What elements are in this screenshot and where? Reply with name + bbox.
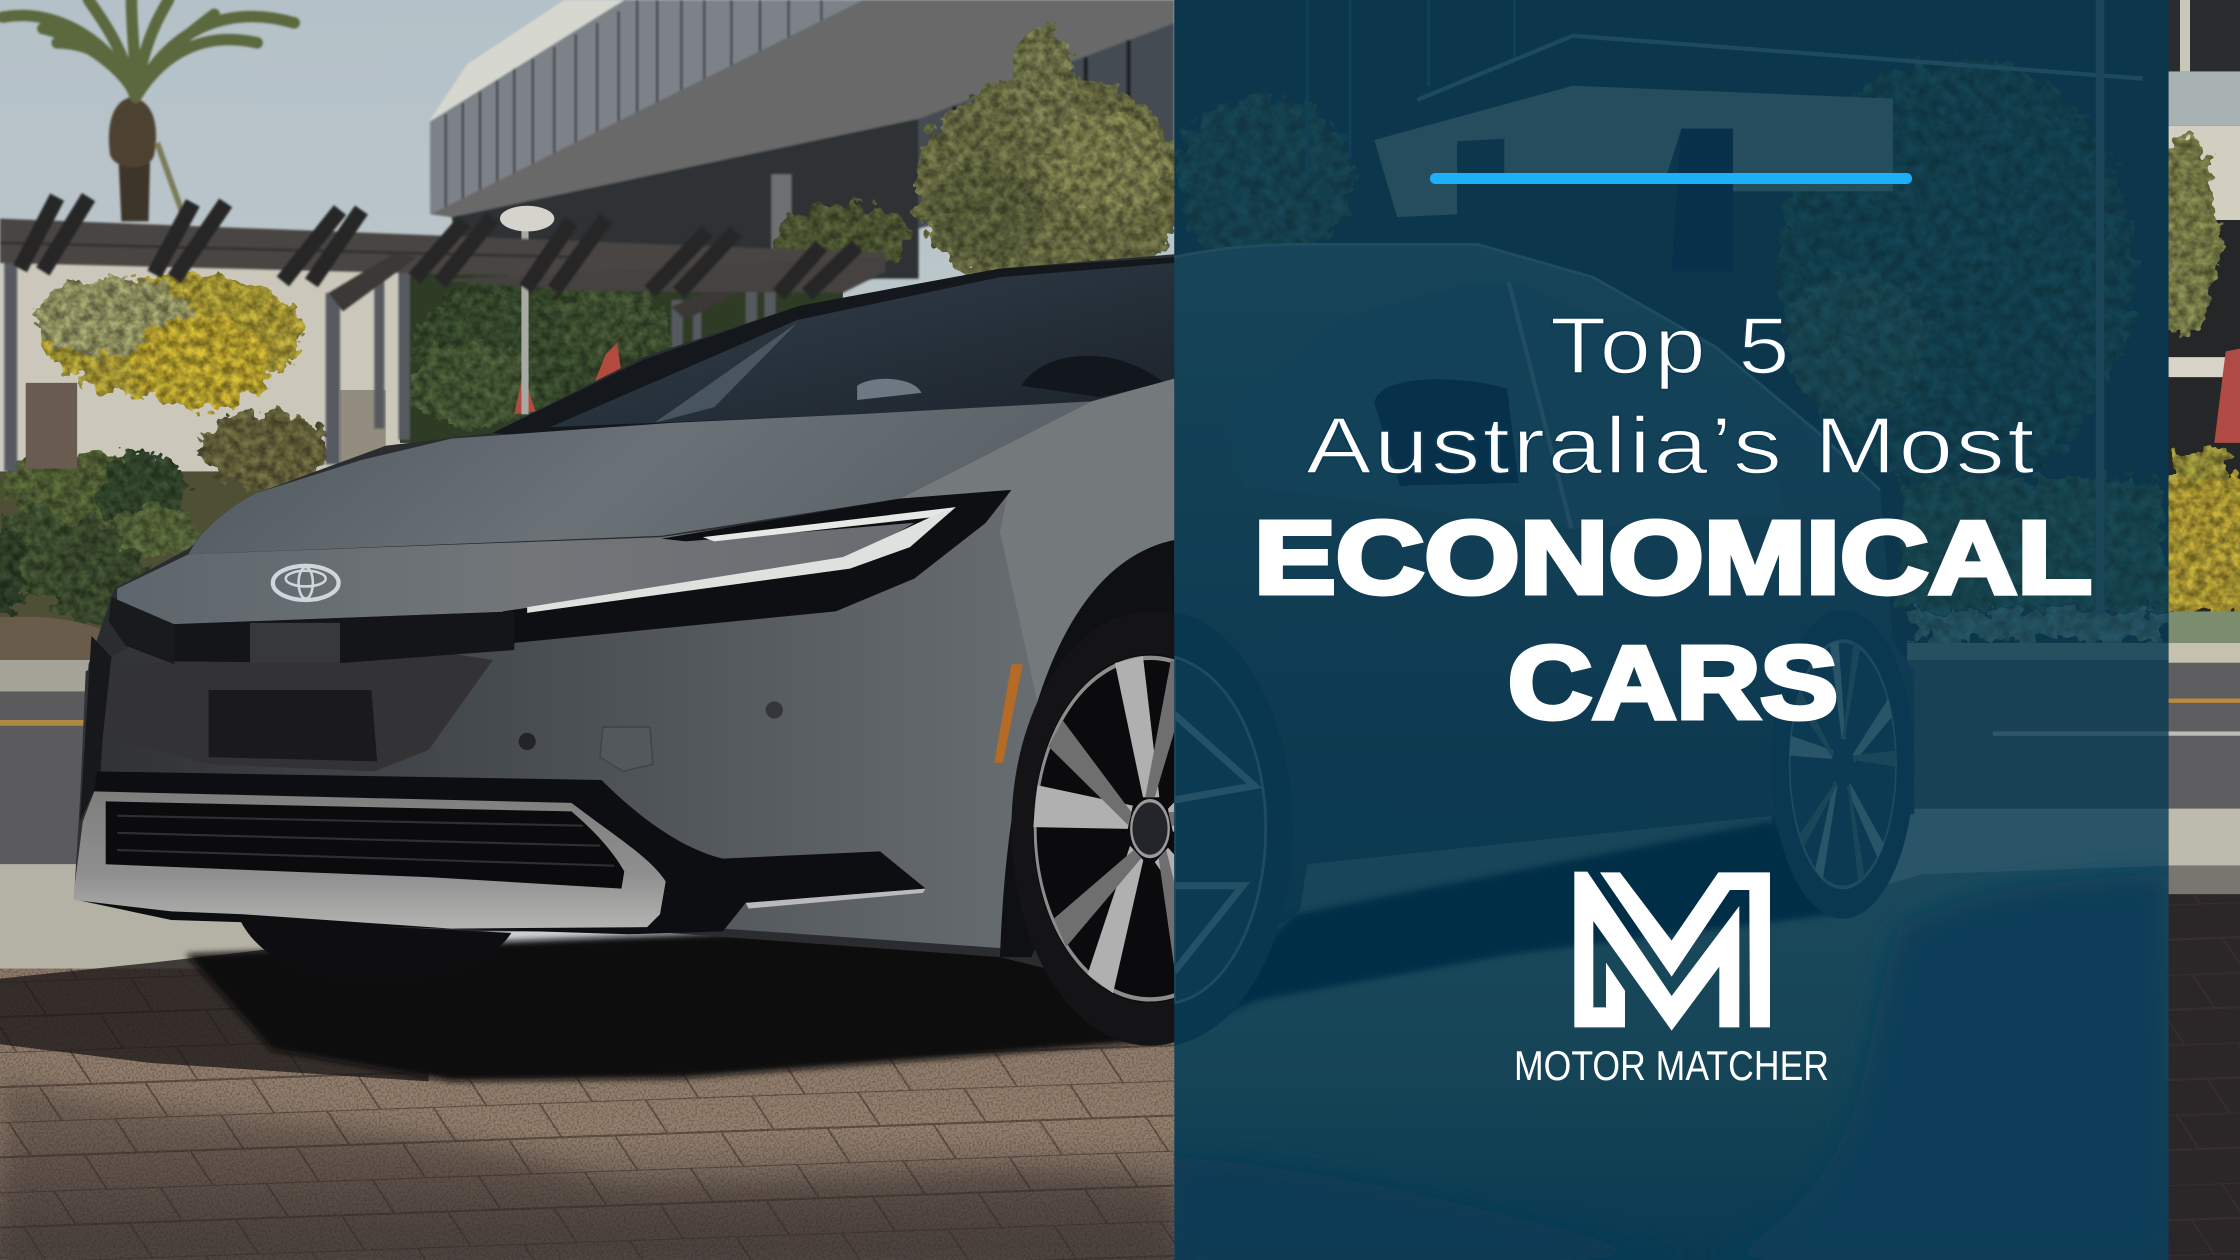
title line: ECONOMICAL: ECONOMICAL	[1254, 500, 2092, 615]
panel base	[1174, 0, 2169, 1260]
car windshield	[493, 257, 1174, 443]
car left reflection panel	[94, 650, 493, 771]
logo wordmark: MOTOR MATCHER	[1514, 1042, 1829, 1089]
palm tree	[3, 0, 294, 221]
icon: MM monogram	[1574, 872, 1770, 1031]
car fender	[900, 379, 1174, 714]
car front fascia	[117, 500, 943, 624]
logo: Motor Matcher	[1514, 872, 1829, 1089]
silver bumper	[74, 791, 666, 929]
chrome strip	[746, 889, 926, 909]
sensors and side marker	[519, 664, 1023, 771]
ghosted building	[1307, 0, 2143, 614]
car front grille band	[171, 611, 514, 663]
licence plate	[209, 690, 377, 761]
toyota badge	[273, 566, 339, 600]
car silhouette base	[74, 254, 1174, 1000]
title line: CARS: CARS	[1508, 625, 1838, 740]
car headlight	[503, 490, 1011, 643]
car hood	[189, 401, 1091, 554]
title	[1254, 301, 2092, 740]
large olive tree	[777, 26, 1186, 297]
title line: Australia's Most: Australia’s Most	[1306, 401, 2037, 490]
front wheel	[1011, 611, 1289, 1046]
ghosted trees and hedge	[1176, 57, 2164, 640]
lower black intake	[77, 771, 926, 934]
car shadow	[0, 914, 1174, 1081]
street and pavement	[0, 660, 1174, 1260]
accent line	[1430, 173, 1912, 184]
car body lower	[74, 493, 1079, 949]
ghosted car	[1174, 244, 1914, 1036]
right edge of the photo	[2143, 0, 2240, 1260]
title line: Top 5: Top 5	[1550, 301, 1793, 390]
office building	[430, 0, 1174, 279]
grille slats	[106, 801, 624, 889]
wheel arch	[1000, 540, 1174, 957]
ghosted front wheel	[1174, 611, 1293, 1046]
sky	[0, 0, 1174, 1260]
garden backdrop	[0, 206, 843, 671]
ghosted ground	[1174, 809, 2169, 1260]
ghosted rear wheel	[1771, 610, 1914, 919]
pergola	[0, 197, 886, 471]
left front tyre	[240, 920, 511, 980]
ghosted road and sidewalk	[1907, 643, 2169, 809]
car: silver-grey hatchback	[74, 254, 1289, 1046]
panel: translucent blue overlay	[1174, 0, 2169, 1260]
